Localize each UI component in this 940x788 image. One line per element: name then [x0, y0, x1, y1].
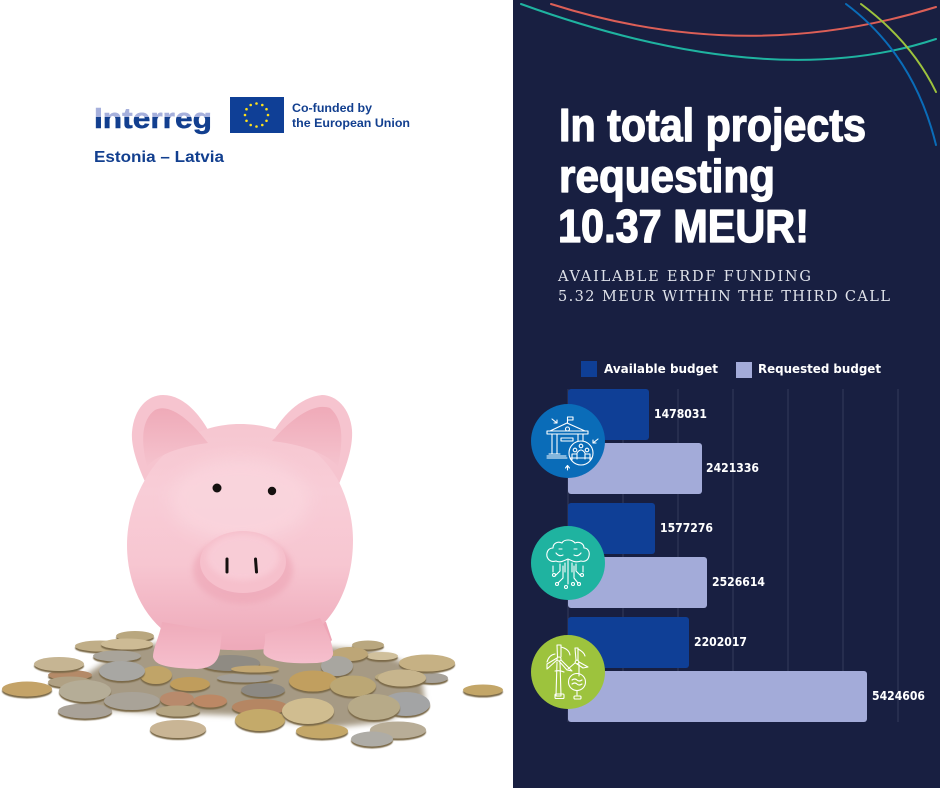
icon: EU flag	[230, 97, 284, 133]
heading: 10.37 MEUR!	[558, 200, 809, 252]
panel: white left side	[0, 0, 513, 788]
pig inner left ear	[143, 408, 208, 466]
bar values	[654, 406, 925, 703]
bars: group 1	[568, 389, 702, 494]
pig snout	[200, 531, 286, 593]
logo: Interreg Estonia-Latvia, co-funded by the EU	[94, 97, 410, 166]
pig nostrils	[227, 559, 256, 572]
icon: wind turbines	[531, 635, 605, 709]
heading	[558, 99, 866, 252]
logo text: co-funded by the European Union	[292, 101, 410, 130]
decorative curved lines	[521, 4, 936, 145]
panel: navy right side	[513, 0, 940, 788]
illustration: coin pile	[2, 631, 503, 746]
logo wordmark: Interreg: Interreg	[94, 103, 212, 135]
bar values: 2202017	[694, 634, 747, 649]
icon: digital cloud	[531, 526, 605, 600]
subheading	[557, 269, 890, 305]
bar values: 2526614	[712, 574, 765, 589]
bars: group 2	[568, 503, 707, 608]
logo wordmark: Interreg: Interreg	[94, 103, 212, 135]
pig snout shadow	[193, 536, 293, 604]
bar values: 2421336	[706, 460, 759, 475]
pig snout top	[207, 534, 279, 580]
subheading: 5.32 MEUR WITHIN THE THIRD CALL	[558, 289, 890, 305]
heading: requesting	[559, 150, 775, 202]
bar values: 1577276	[660, 520, 713, 535]
icon: institution with people	[531, 404, 605, 478]
heading: In total projects	[559, 99, 866, 151]
pig back leg	[315, 618, 332, 652]
legend: requested budget: Requested budget	[758, 361, 881, 376]
subheading: AVAILABLE ERDF FUNDING	[557, 269, 811, 285]
bar chart	[568, 389, 925, 722]
logo text: co-funded by the European Union: the European Union	[292, 116, 410, 130]
bar values: 5424606	[872, 688, 925, 703]
pig body	[127, 424, 353, 650]
pig left ear	[132, 395, 215, 484]
pig left foot	[153, 622, 222, 669]
legend	[581, 361, 881, 378]
logo text: co-funded by the European Union: Co-funded by	[292, 101, 372, 115]
pig right ear	[269, 395, 352, 484]
pig inner right ear	[272, 407, 341, 466]
logo subtitle: Estonia – Latvia: Estonia – Latvia	[94, 149, 224, 166]
legend: available budget: Available budget	[604, 361, 718, 376]
bars: group 3	[568, 617, 867, 722]
bar values: 1478031	[654, 406, 707, 421]
pig right foot	[263, 618, 333, 663]
pig eyes	[212, 484, 276, 495]
pig body highlight	[170, 458, 310, 542]
illustration: piggy bank	[127, 395, 353, 669]
